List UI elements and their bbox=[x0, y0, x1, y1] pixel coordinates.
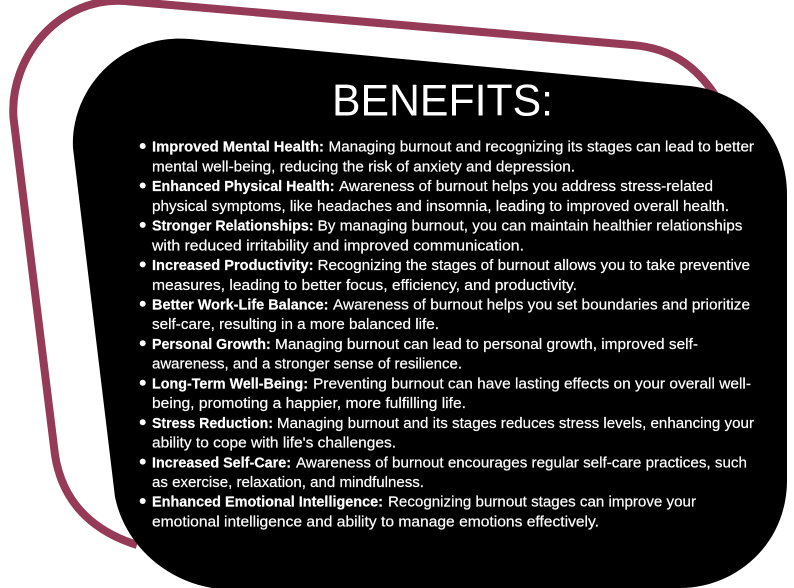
item: stronger relationships: By managing burnout, you can maintain healthier relationships bbox=[318, 218, 742, 235]
item: stronger relationships: Stronger Relationships: bbox=[152, 218, 314, 235]
item: enhanced physical health: physical symptoms, like headaches and insomnia, leading to improved overall health. bbox=[152, 198, 729, 215]
item: improved mental health: Managing burnout and recognizing its stages can lead to better bbox=[328, 139, 754, 156]
item: better work-life balance: Awareness of burnout helps you set boundaries and prioritize bbox=[333, 296, 750, 314]
item: personal growth: Personal Growth: bbox=[152, 336, 271, 353]
title: BENEFITS: bbox=[332, 77, 553, 126]
item: improved mental health: mental well-being, reducing the risk of anxiety and depression. bbox=[152, 158, 575, 175]
item: long-term well-being bbox=[140, 375, 751, 412]
item: personal growth: awareness, and a stronger sense of resilience. bbox=[152, 356, 462, 373]
item: stress reduction bbox=[140, 415, 754, 452]
item: increased productivity: measures, leading to better focus, efficiency, and productivity. bbox=[152, 277, 577, 294]
item: enhanced physical health bbox=[140, 178, 729, 215]
item: stress reduction: Managing burnout and its stages reduces stress levels, enhancing your bbox=[277, 415, 754, 432]
benefits list bbox=[140, 139, 754, 531]
item: personal growth: Managing burnout can lead to personal growth, improved self- bbox=[275, 336, 698, 353]
item: stronger relationships bbox=[140, 218, 742, 254]
item: enhanced emotional intelligence bbox=[140, 494, 696, 531]
item: increased productivity: Recognizing the stages of burnout allows you to take preventive bbox=[318, 257, 750, 274]
item: long-term well-being: Long-Term Well-Being: bbox=[152, 375, 308, 392]
item: better work-life balance: self-care, resulting in a more balanced life. bbox=[152, 316, 439, 333]
item: better work-life balance bbox=[140, 296, 750, 333]
item: increased productivity bbox=[140, 257, 750, 294]
item: enhanced physical health: Awareness of burnout helps you address stress-related bbox=[339, 178, 713, 195]
item: improved mental health: Improved Mental Health: bbox=[152, 139, 324, 156]
item: increased self-care bbox=[140, 454, 747, 491]
item: enhanced emotional intelligence: Recognizing burnout stages can improve your bbox=[388, 494, 696, 511]
item: increased self-care: as exercise, relaxation, and mindfulness. bbox=[152, 474, 424, 491]
item: increased self-care: Increased Self-Care: bbox=[152, 454, 291, 471]
item: enhanced physical health: Enhanced Physical Health: bbox=[152, 178, 334, 195]
item: stress reduction: ability to cope with life's challenges. bbox=[152, 435, 396, 452]
item: increased self-care: Awareness of burnout encourages regular self-care practices, such bbox=[296, 454, 747, 471]
item: enhanced emotional intelligence: Enhanced Emotional Intelligence: bbox=[152, 494, 383, 511]
item: improved mental health bbox=[140, 139, 754, 175]
item: long-term well-being: being, promoting a happier, more fulfilling life. bbox=[152, 395, 466, 412]
item: stress reduction: Stress Reduction: bbox=[152, 415, 273, 432]
item: better work-life balance: Better Work-Life Balance: bbox=[152, 296, 328, 314]
item: enhanced emotional intelligence: emotional intelligence and ability to manage emotions effectively. bbox=[152, 514, 599, 531]
item: personal growth bbox=[140, 336, 698, 373]
item: long-term well-being: Preventing burnout can have lasting effects on your overall well- bbox=[313, 375, 751, 392]
item: stronger relationships: with reduced irritability and improved communication. bbox=[151, 237, 524, 254]
item: increased productivity: Increased Productivity: bbox=[152, 257, 314, 274]
